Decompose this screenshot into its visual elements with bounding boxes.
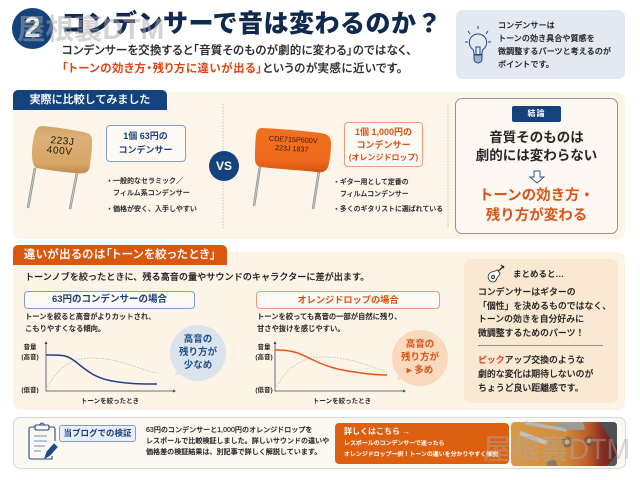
bullet list: 63 yen capacitor: フィルム系コンデンサー: [113, 190, 190, 197]
photo: guitar: [511, 421, 617, 466]
case description: [25, 312, 156, 333]
vs badge: VS: [216, 159, 232, 173]
price box: 63 yen: [106, 125, 186, 162]
summary panel: [464, 259, 618, 403]
summary heading: まとめると…: [513, 269, 564, 279]
case description: トーンを絞っても高音の一部が自然に残り、: [257, 312, 402, 321]
tone heading: 違いが出るのは「トーンを絞ったとき」: [24, 249, 216, 261]
callout bubble: 少なめ: [184, 360, 212, 371]
line chart: (低音): [21, 385, 39, 394]
blog text: レスポールで比較検証しました。詳しいサウンドの違いや: [146, 438, 329, 445]
conclusion highlight: トーンの効き方・: [479, 188, 594, 204]
watermark top: 屋根裏DTM: [17, 14, 164, 46]
header number badge: [12, 8, 53, 49]
case heading: [24, 291, 195, 309]
line chart: 音量: [258, 342, 271, 351]
icon: tan capacitor: [26, 126, 92, 210]
comparison heading: [13, 90, 167, 110]
blog tag: 当ブログでの検証: [63, 428, 132, 438]
price box: 63 yen: コンデンサー: [118, 145, 172, 155]
tip text: ポイントです。: [498, 60, 554, 69]
comparison heading: 実際に比較してみました: [30, 94, 150, 106]
callout bubble: 残り方が: [179, 347, 217, 358]
tip text: コンデンサーは: [498, 21, 555, 30]
tip box: [456, 10, 625, 79]
price box: 1000 yen: [344, 122, 423, 167]
subtitle text: コンデンサーを交換すると「音質そのものが劇的に変わる」のではなく、: [62, 45, 412, 57]
price box: 63 yen: 1個 63円の: [123, 131, 168, 141]
conclusion statement: 音質そのものは: [489, 130, 584, 145]
tone heading: [13, 245, 227, 265]
icon: guitar: [488, 264, 504, 282]
line chart: (高音): [255, 352, 273, 361]
summary text: [478, 286, 611, 338]
case description: [257, 312, 402, 333]
summary divider: [478, 345, 603, 346]
icon: clipboard: [28, 422, 58, 460]
line chart: [21, 341, 176, 405]
line chart: (低音): [255, 385, 273, 394]
bullet list: 63 yen capacitor: [106, 176, 197, 213]
summary text: コンデンサーはギターの: [478, 287, 576, 297]
icon: light bulb: [465, 26, 491, 64]
bullet list: orange drop: ・多くのギタリストに選ばれている: [333, 206, 443, 213]
conclusion statement: 劇的には変わらない: [476, 148, 597, 163]
link heading: 詳しくはこちら →: [344, 427, 410, 436]
blog text: [146, 426, 329, 456]
price box: 1000 yen: (オレンジドロップ): [349, 153, 418, 162]
vs badge: [209, 151, 239, 181]
bullet list: orange drop: [333, 178, 443, 213]
blog text: 価格差の検証結果は、別記事で詳しく解説しています。: [146, 449, 321, 456]
callout bubble: 高音の: [406, 339, 434, 350]
sub panel: 63 yen case: [21, 291, 226, 405]
icon: tan capacitor: 400V: [46, 145, 73, 158]
case heading: 63円のコンデンサーの場合: [52, 294, 167, 305]
summary note: ちょうど良い距離感です。: [478, 383, 584, 393]
line chart: トーンを絞ったとき: [81, 396, 139, 405]
bullet list: 63 yen capacitor: ・一般的なセラミック／: [106, 178, 183, 185]
summary text: トーンの効きを自分好みに: [478, 314, 584, 324]
summary note: 劇的な変化は期待しないのが: [478, 369, 593, 379]
icon: orange capacitor: CDE715P600V: [269, 134, 318, 145]
conclusion highlight: [479, 187, 594, 224]
header number badge: 2: [24, 12, 41, 44]
price box: 1000 yen: コンデンサー: [356, 140, 410, 150]
link text: オレンジドロップ一択！トーンの違いを分かりやすく解説: [344, 452, 498, 458]
line chart: 音量: [24, 342, 37, 351]
panel: tone difference: [13, 252, 625, 410]
icon: orange capacitor: 223J 1837: [275, 143, 309, 154]
tip text: 微調整するパーツと考えるのが: [498, 47, 611, 56]
callout bubble: [392, 330, 448, 386]
conclusion highlight: 残り方が変わる: [486, 208, 587, 224]
bullet list: orange drop: ・ギター用として定番の: [333, 179, 409, 186]
summary note: ピックアップ交換のような: [478, 355, 584, 365]
panel: blog verification: [13, 417, 626, 469]
panel: comparison: [13, 92, 625, 239]
link text: [344, 440, 498, 458]
line chart: (高音): [21, 352, 39, 361]
case description: トーンを絞ると高音がよりカットされ、: [25, 312, 156, 321]
case heading: [256, 291, 440, 309]
callout bubble: ▸ 多め: [407, 365, 433, 376]
subtitle text: [62, 44, 412, 75]
callout bubble: [170, 325, 226, 381]
link button: [335, 423, 509, 464]
sub panel: orange drop case: [255, 291, 448, 405]
case heading: オレンジドロップの場合: [297, 295, 399, 305]
blog tag: [59, 425, 136, 442]
callout bubble: 高音の: [184, 334, 212, 345]
summary note: [478, 355, 594, 393]
title: コンデンサーで音は変わるのか？: [61, 10, 442, 38]
tone lead text: トーンノブを絞ったときに、残る高音の量やサウンドのキャラクターに差が出ます。: [25, 272, 369, 282]
conclusion statement: [476, 130, 597, 163]
summary text: 微調整するためのパーツ！: [478, 328, 584, 338]
link text: レスポールのコンデンサーで迷ったら: [344, 441, 445, 447]
arrow down: [529, 170, 545, 184]
case description: こもりやすくなる傾向。: [25, 324, 105, 333]
icon: orange capacitor: [252, 128, 331, 210]
conclusion tag: 結論: [528, 109, 546, 118]
bullet list: orange drop: フィルムコンデンサー: [340, 191, 409, 198]
subtitle text: 「トーンの効き方・残り方に違いが出る」というのが実感に近いです。: [62, 63, 403, 75]
tip text: トーンの効き具合や質感を: [498, 34, 595, 43]
price box: 1000 yen: 1個 1,000円の: [355, 127, 412, 137]
conclusion box: [455, 98, 618, 234]
line chart: トーンを絞ったとき: [313, 396, 371, 405]
case description: 甘さや抜けを感じやすい。: [257, 324, 345, 333]
watermark bottom: 屋根裏DTM: [483, 434, 630, 466]
icon: tan capacitor: 223J: [50, 135, 75, 148]
blog text: 63円のコンデンサーと1,000円のオレンジドロップを: [146, 427, 312, 434]
bullet list: 63 yen capacitor: ・価格が安く、入手しやすい: [106, 206, 197, 213]
tip text: [498, 20, 611, 69]
summary text: 「個性」を決めるものではなく、: [478, 301, 611, 311]
line chart: [255, 341, 406, 405]
callout bubble: 残り方が: [401, 352, 439, 363]
conclusion tag: [512, 106, 561, 122]
